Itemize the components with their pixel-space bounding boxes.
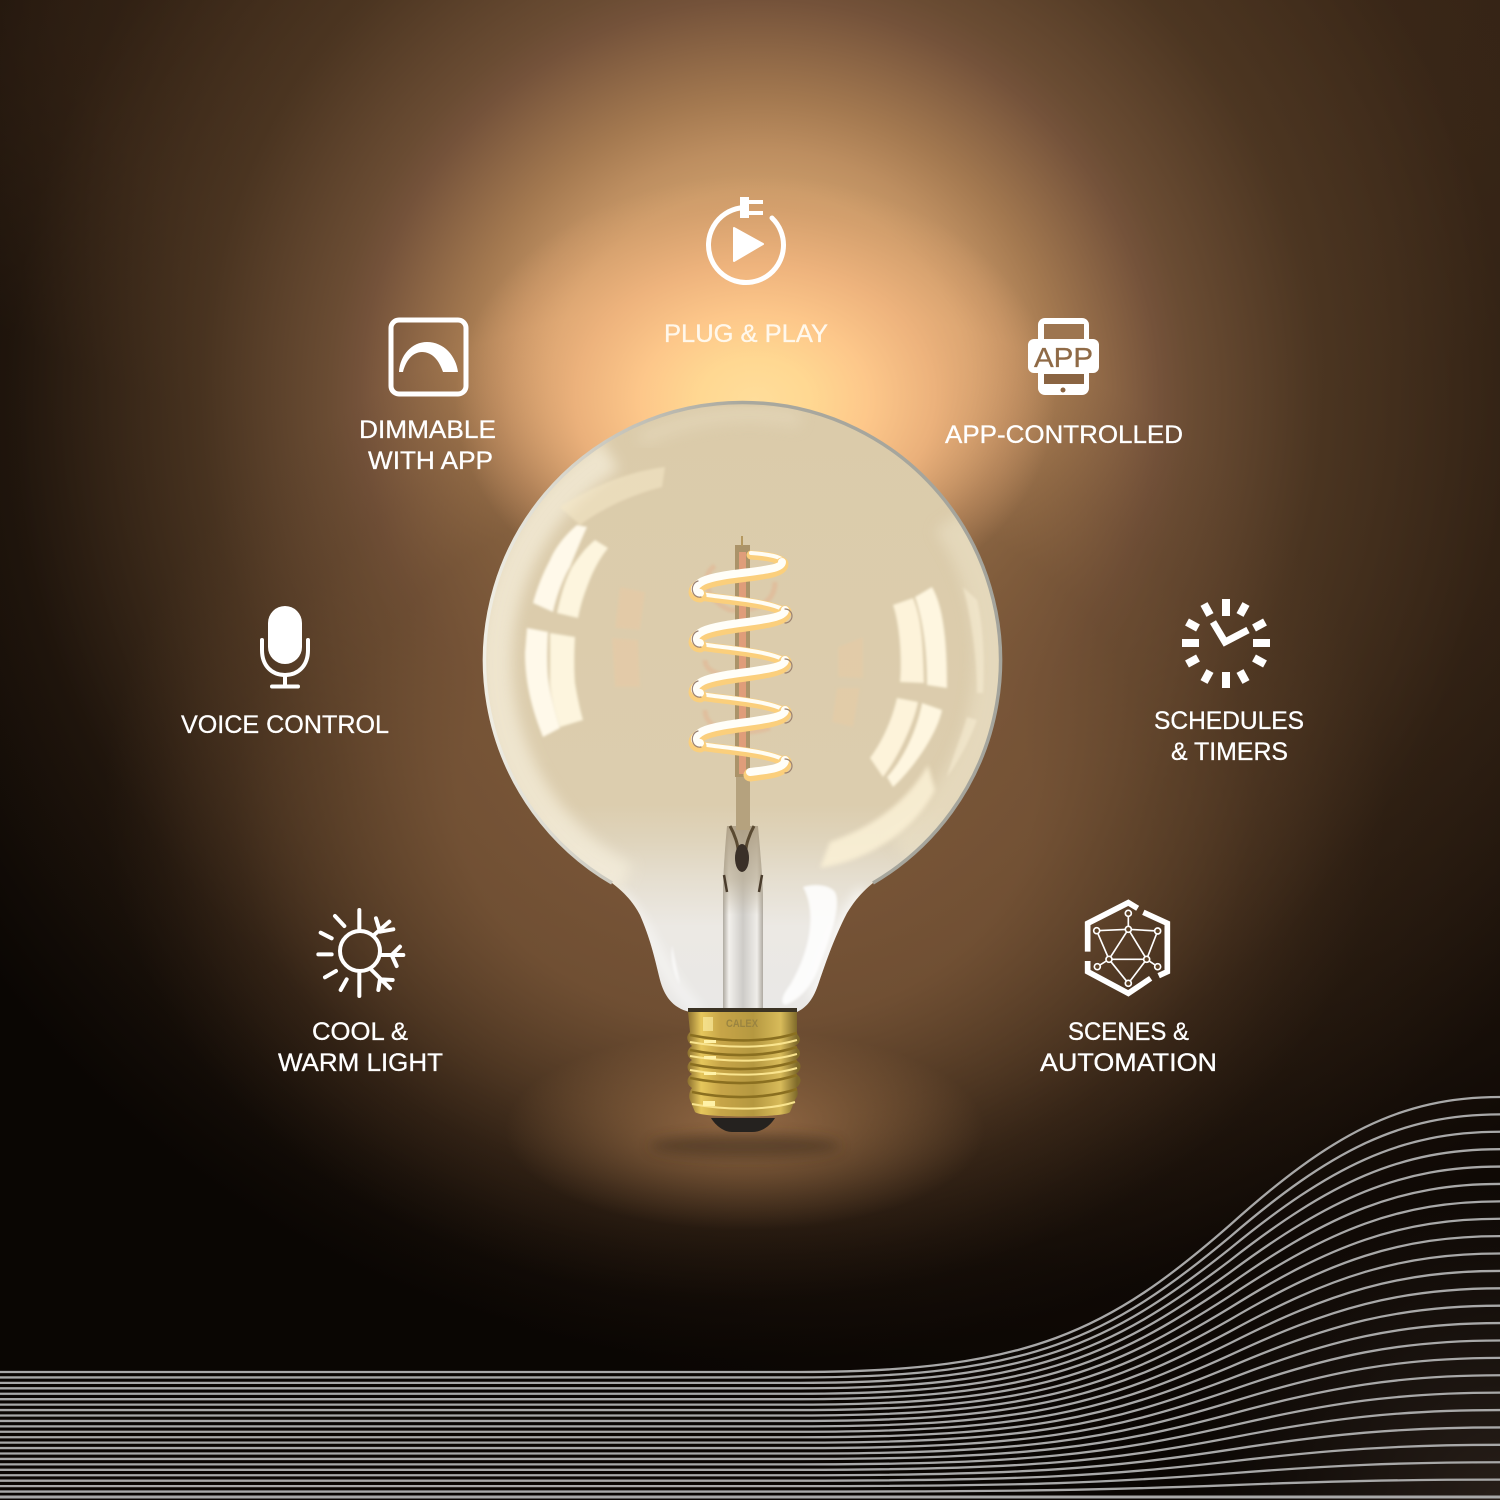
label: AUTOMATION (1040, 1049, 1217, 1077)
glass reflections (525, 467, 984, 1005)
bulb shadow (650, 1134, 840, 1158)
glass stem (723, 775, 763, 1012)
lower reflections (820, 765, 935, 868)
label: VOICE CONTROL (181, 711, 389, 739)
feature: plug and play (664, 197, 828, 348)
label: PLUG & PLAY (664, 320, 828, 348)
filament spiral (692, 553, 792, 775)
right window reflection (870, 586, 984, 788)
icon: plug and play (708, 197, 783, 283)
label: WITH APP (368, 447, 493, 475)
screw contact (711, 1118, 775, 1132)
feature: cool and warm light (278, 910, 443, 1077)
brass screw base (687, 1008, 801, 1132)
base brand: CALEX (726, 1018, 759, 1030)
feature: dimmable with app (359, 320, 503, 475)
icon: sun and snowflake (318, 910, 403, 996)
back filament reflection (705, 566, 775, 732)
label: SCHEDULES (1154, 707, 1304, 735)
icon: dimmer (391, 320, 466, 394)
light bulb (484, 402, 1000, 1158)
front strands (695, 562, 785, 775)
icon: app phone (1028, 318, 1099, 395)
label: APP-CONTROLLED (945, 421, 1183, 449)
label: COOL & (312, 1018, 408, 1046)
wave line pattern (0, 1097, 1500, 1498)
icon: microphone (262, 606, 308, 686)
label: DIMMABLE (359, 416, 496, 444)
label: WARM LIGHT (278, 1049, 443, 1077)
back strands (700, 553, 785, 762)
icon: network hexagon (1088, 903, 1167, 993)
feature: voice control (181, 606, 389, 739)
label: & TIMERS (1171, 738, 1288, 766)
icon: clock (1182, 599, 1270, 688)
label: SCENES & (1068, 1018, 1189, 1046)
filament support (735, 536, 750, 777)
feature: schedules and timers (1154, 599, 1311, 766)
feature: app controlled (945, 318, 1183, 449)
feature: scenes and automation (1040, 903, 1217, 1077)
glass globe (484, 402, 1000, 1012)
left window reflection (525, 467, 665, 737)
icon: app phone: APP (1034, 342, 1093, 373)
